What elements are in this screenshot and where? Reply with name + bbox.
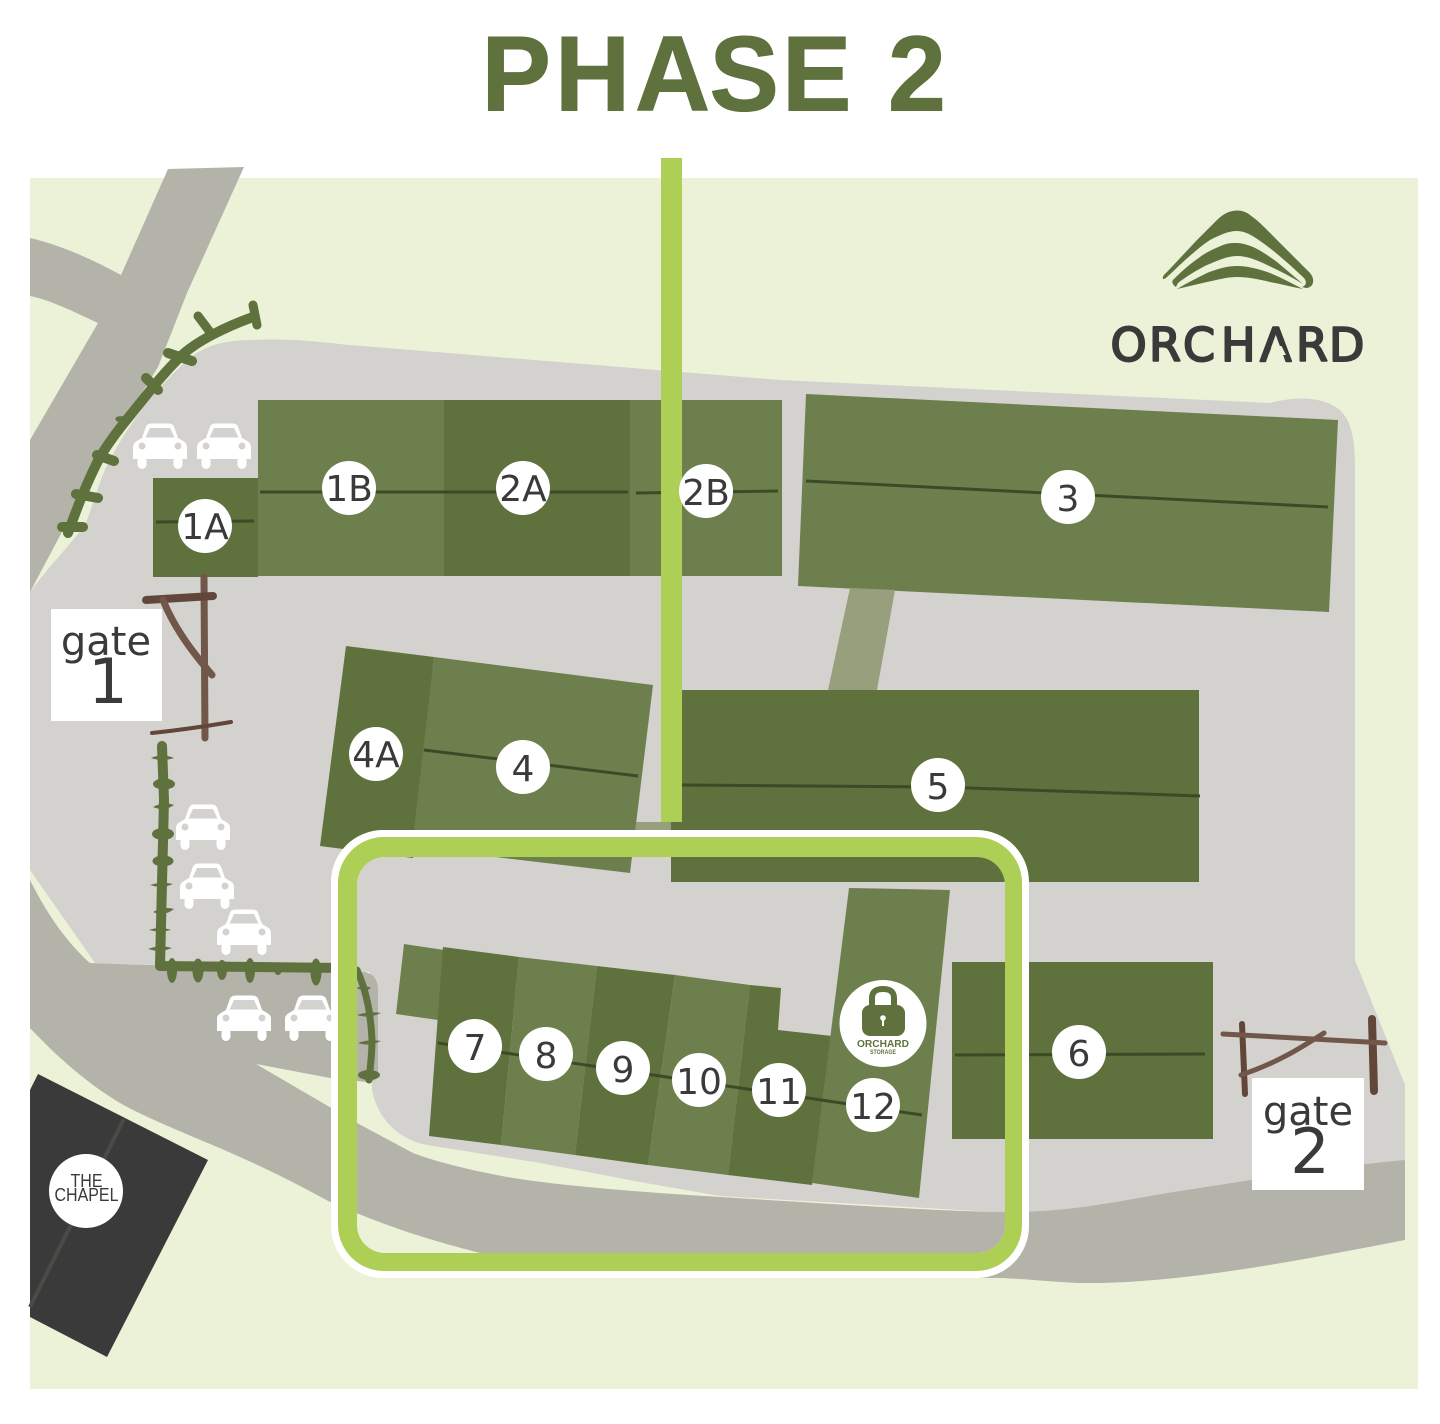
unit markers phase 2: 11	[756, 1072, 802, 1113]
units 1B 2A 2B	[258, 400, 782, 576]
gate 1 sign: gate	[61, 619, 151, 665]
gate 2 sign: 2	[1290, 1115, 1330, 1188]
unit markers phase 2: 8	[535, 1036, 557, 1077]
gate 2 sign	[1252, 1078, 1364, 1190]
units 4A and 4	[320, 646, 653, 873]
icon: orchard storage lock	[840, 980, 926, 1067]
gate 1 structure	[146, 577, 231, 738]
orchard logo	[1110, 211, 1364, 372]
icon: orchard storage lock: STORAGE	[870, 1050, 896, 1056]
car park surface	[30, 339, 1405, 1214]
unit markers upper: 4	[512, 749, 534, 790]
unit markers upper: 2B	[682, 473, 730, 514]
walkway between 3 and 5	[828, 588, 895, 690]
parking icons	[133, 424, 339, 1041]
title: 2	[888, 14, 946, 134]
unit markers upper: 5	[927, 767, 949, 808]
unit 5	[671, 690, 1200, 882]
unit markers phase 2: 9	[612, 1050, 634, 1091]
hedge: north	[62, 305, 257, 533]
phase 2 highlight frame	[331, 830, 1029, 1278]
icon: orchard storage lock: ORCHARD	[857, 1038, 909, 1050]
orchard logo: ORCHARD	[1110, 318, 1364, 372]
phase 2 pointer line	[661, 158, 682, 822]
unit 3	[798, 394, 1338, 612]
unit 1A	[153, 478, 258, 577]
gate 2 sign: gate	[1263, 1089, 1353, 1135]
gate 1 sign: 1	[88, 645, 128, 718]
building: the chapel: CHAPEL	[54, 1185, 118, 1205]
unit markers upper: 2A	[499, 469, 547, 510]
unit 6	[952, 962, 1213, 1139]
title: PHASE	[482, 14, 851, 134]
unit markers phase 2	[448, 1019, 900, 1132]
unit markers upper: 6	[1068, 1034, 1090, 1075]
hedge: west	[148, 746, 345, 986]
units 7 to 12	[396, 888, 950, 1198]
road: south loop	[30, 880, 1405, 1283]
hedge: storage	[356, 970, 381, 1080]
unit markers upper: 1B	[325, 469, 373, 510]
unit markers phase 2: 7	[464, 1028, 486, 1069]
unit markers upper: 3	[1057, 479, 1079, 520]
building: the chapel	[30, 1074, 208, 1357]
unit markers phase 2: 10	[676, 1062, 722, 1103]
gate 1 sign	[51, 609, 162, 721]
road: north entrance	[30, 167, 244, 592]
unit markers upper: 4A	[352, 735, 400, 776]
unit markers upper	[178, 461, 1106, 1079]
gate 2 structure	[1223, 1019, 1385, 1094]
unit markers phase 2: 12	[850, 1087, 896, 1128]
walkway between 4 and 5	[635, 822, 671, 836]
building: the chapel: THE	[70, 1171, 102, 1191]
unit markers upper: 1A	[181, 507, 229, 548]
